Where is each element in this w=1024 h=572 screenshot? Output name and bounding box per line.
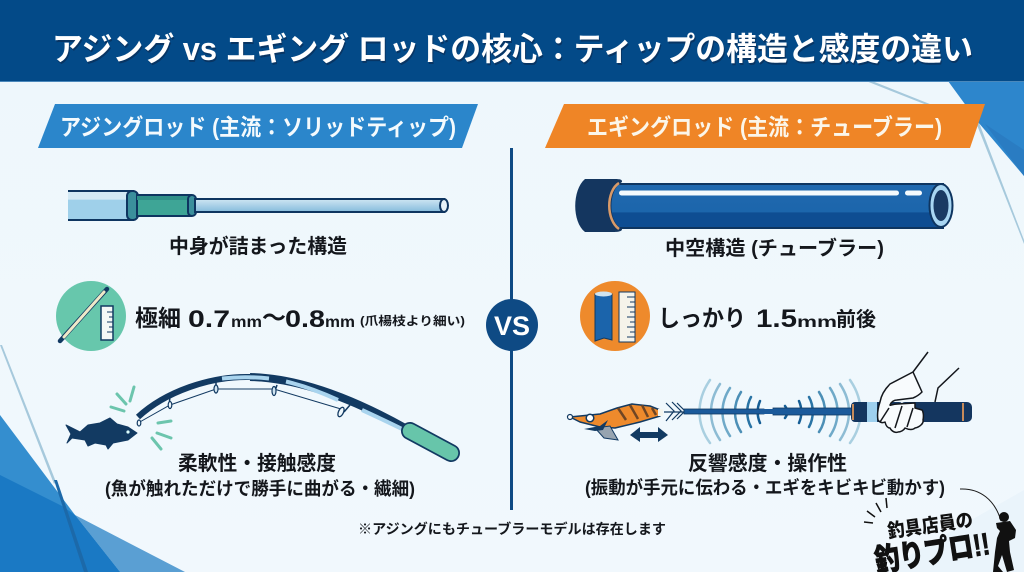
metric: thickness: 0.8 bbox=[285, 306, 325, 333]
icon: solid tip rod bbox=[68, 190, 448, 221]
VS badge bbox=[486, 299, 538, 351]
icon: toothpick and ruler bbox=[56, 281, 126, 351]
heading: aging rod bbox=[38, 104, 478, 148]
caption: response sensitivity: 反響感度・操作性 bbox=[688, 451, 847, 475]
caption: flexibility: 柔軟性・接触感度 bbox=[178, 451, 336, 475]
panel: eging rod bbox=[545, 104, 985, 498]
VS badge: VS bbox=[494, 311, 530, 341]
title banner: アジング vs エギング ロッドの核心：ティップの構造と感度の違い bbox=[53, 33, 974, 69]
caption: flexibility detail: (魚が触れただけで勝手に曲がる・繊細) bbox=[105, 478, 415, 499]
label: hollow structure: 中空構造 (チューブラー) bbox=[665, 236, 884, 260]
icon: rod and hand bbox=[684, 352, 972, 432]
heading: eging rod: エギングロッド (主流：チューブラー) bbox=[587, 114, 942, 140]
icon: bent rod bbox=[137, 377, 451, 453]
icon: squid jig lure bbox=[568, 402, 685, 440]
logo: tsuri pro bbox=[864, 489, 1016, 572]
heading: eging rod bbox=[545, 104, 985, 148]
icon: tube and ruler bbox=[580, 281, 650, 351]
label: solid structure: 中身が詰まった構造 bbox=[169, 234, 347, 258]
icon: sound waves bbox=[700, 380, 860, 443]
arrow: jig motion bbox=[630, 427, 668, 442]
footnote: ※アジングにもチューブラーモデルは存在します bbox=[358, 521, 666, 537]
metric: thickness: 極細 bbox=[135, 305, 181, 331]
metric: thickness bbox=[135, 305, 465, 333]
metric: thickness: しっかり bbox=[658, 305, 746, 331]
icon: tubular rod bbox=[575, 179, 952, 232]
icon: angler silhouette bbox=[960, 489, 1016, 572]
metric: thickness: mm bbox=[325, 314, 355, 331]
metric: thickness: mm bbox=[231, 314, 262, 331]
metric: thickness: (爪楊枝より細い) bbox=[360, 313, 465, 328]
metric: thickness bbox=[658, 305, 876, 333]
panel: aging rod bbox=[38, 104, 478, 499]
center divider bbox=[510, 148, 513, 510]
metric: thickness: 〜 bbox=[262, 305, 286, 332]
caption: response detail: (振動が手元に伝わる・エギをキビキビ動かす) bbox=[585, 477, 945, 498]
icon: bite marks bbox=[111, 387, 171, 449]
heading: aging rod: アジングロッド (主流：ソリッドティップ) bbox=[60, 114, 456, 140]
metric: thickness: 0.7 bbox=[188, 306, 230, 333]
title banner: アジング vs エギング ロッドの核心：ティップの構造と感度の違い bbox=[52, 31, 973, 67]
metric: thickness: 1.5 bbox=[756, 305, 797, 333]
title banner bbox=[0, 0, 1024, 82]
metric: thickness: mm bbox=[797, 314, 837, 331]
logo: tsuri pro: 釣具店員の bbox=[886, 508, 974, 543]
icon: fish bbox=[66, 418, 137, 449]
metric: thickness: 前後 bbox=[836, 308, 876, 331]
